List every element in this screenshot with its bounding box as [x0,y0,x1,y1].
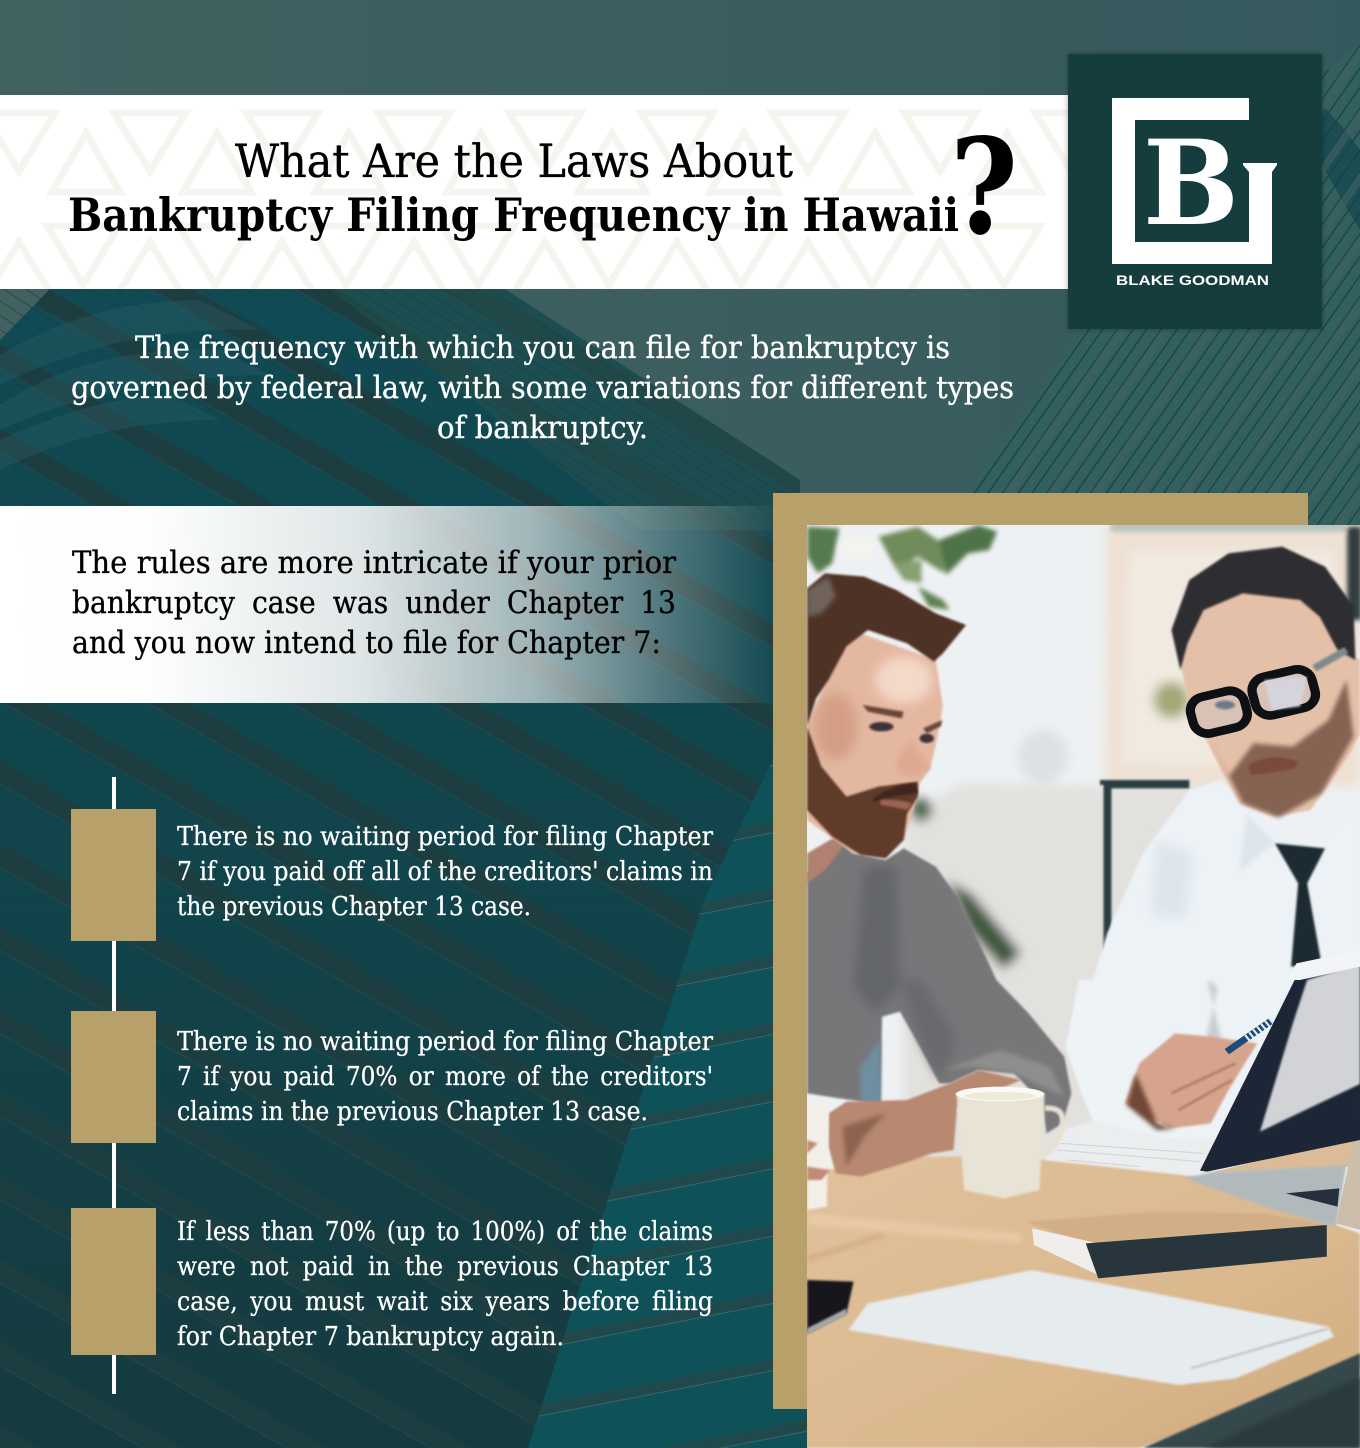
intro text: of bankruptcy. [437,410,648,446]
list item 3: If less than 70% (up to 100%) of the claims [177,1216,713,1247]
list item 2: 7 if you paid 70% or more of the creditors' [177,1061,713,1092]
title: ? [950,110,1018,265]
table [800,1120,1360,1448]
laptop [1184,1165,1346,1227]
photo: two men reviewing documents at a table [807,525,1360,1448]
man 2: hair [1171,547,1355,670]
mug [1039,1108,1063,1158]
list item 2: There is no waiting period for filing Chapter [177,1026,714,1057]
man 1: beard [807,727,918,858]
papers [848,1270,1334,1385]
man 1: neck [807,837,843,883]
list item 3: case, you must wait six years before filing [177,1286,713,1317]
man 2: shirt [1066,780,1360,1140]
pole [1100,780,1189,967]
man 1: hair [807,573,966,727]
intro text: The frequency with which you can file for bankruptcy is [135,330,950,366]
timeline: vertical line [112,777,116,1394]
list item 2: claims in the previous Chapter 13 case. [177,1096,648,1127]
list item 3: for Chapter 7 bankruptcy again. [177,1321,564,1352]
left cup [807,1098,829,1210]
man 1 arm and hand [829,1070,1021,1177]
wood wedge under tablet [1207,1137,1360,1173]
list item 1: the previous Chapter 13 case. [177,891,531,922]
title: Bankruptcy Filing Frequency in Hawaii [68,188,959,242]
man 1: face [807,633,943,853]
man 2 hand [1066,980,1171,1140]
callout band: rules: bankruptcy case was under Chapter 13 [72,585,676,621]
list item 1: There is no waiting period for filing Chapter [177,821,714,852]
title: What Are the Laws About [235,134,793,188]
logo bracket mark [1112,98,1277,264]
man 1: sweater [807,840,1071,1133]
man 2: stubble [1211,680,1354,817]
list item 2 [71,1011,714,1143]
logo letter B: B [1143,114,1239,252]
man 2: tie [1275,843,1325,967]
notebook [1025,1212,1327,1243]
list item 3 [71,1208,713,1355]
triangle pattern [0,113,1107,300]
man 1: eyes and brows [862,705,942,733]
callout band: rules: and you now intend to file for Chapter 7: [72,625,661,661]
paper under arm [1043,1120,1218,1177]
list item 1: 7 if you paid off all of the creditors' claims in [177,856,713,887]
list item 1 [71,809,714,941]
man 2: face [1179,587,1360,817]
logo wordmark: BLAKE GOODMAN [1116,273,1269,288]
wall and background [800,520,1360,1448]
intro text: governed by federal law, with some variations for different types [71,370,1014,406]
callout band: rules [0,506,773,703]
logo panel [1068,54,1322,329]
items on the table [807,950,1360,1385]
title [68,110,1018,265]
gold photo frame [773,493,1308,1409]
title banner [0,95,1107,300]
tablet [1200,950,1360,1172]
phone [807,1280,854,1333]
pen [1227,1021,1271,1052]
man 2: glasses [1187,666,1319,737]
intro text [71,330,1014,446]
callout band: rules: The rules are more intricate if your prior [72,545,677,581]
list item 3: were not paid in the previous Chapter 13 [177,1251,713,1282]
